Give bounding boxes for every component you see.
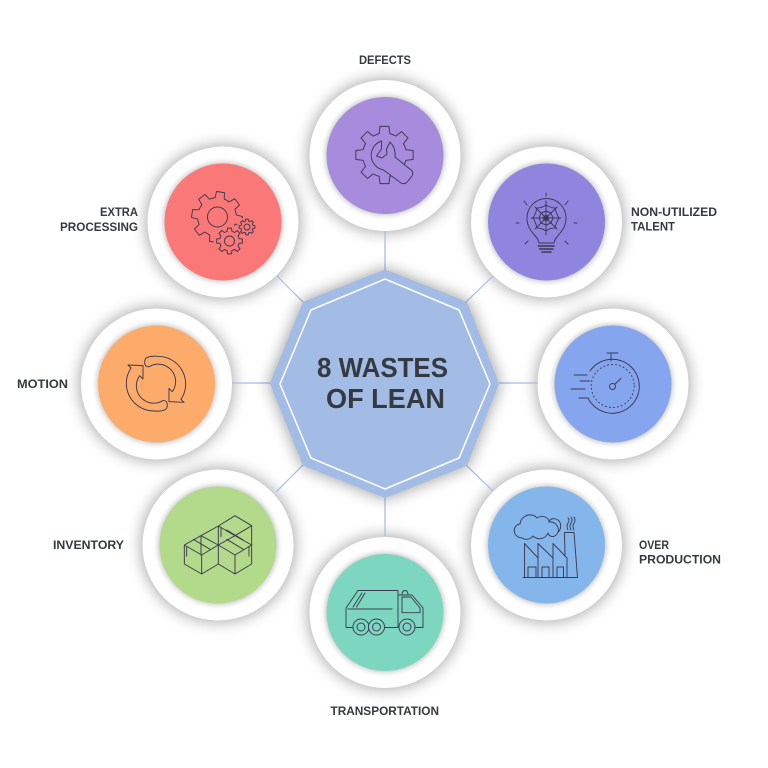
panel: defects <box>309 53 461 232</box>
title <box>317 352 448 414</box>
label: inventory: INVENTORY <box>53 538 124 552</box>
label: extra processing <box>60 205 138 234</box>
title: 8 WASTES <box>317 352 448 383</box>
icon: stopwatch <box>571 353 639 413</box>
label: extra processing: PROCESSING <box>60 220 138 234</box>
panel: motion <box>17 308 232 460</box>
icon: truck <box>346 590 423 635</box>
label: motion: MOTION <box>17 379 68 391</box>
label: non-utilized talent: NON-UTILIZED <box>631 205 717 219</box>
icon: circular arrows <box>126 356 186 411</box>
central octagon <box>270 270 499 498</box>
icon: stacked boxes <box>184 516 252 574</box>
icon: gears <box>189 189 257 257</box>
label: non-utilized talent: TALENT <box>631 220 676 234</box>
label: defects: DEFECTS <box>359 53 411 67</box>
label: over production <box>639 538 721 566</box>
title: OF LEAN <box>326 383 445 414</box>
label: non-utilized talent <box>631 205 717 234</box>
icon: gear and wrench <box>356 126 413 184</box>
panel: extra processing <box>60 146 299 298</box>
panel: over-speed stopwatch <box>537 308 689 460</box>
icon: factory <box>514 515 578 578</box>
panel: non-utilized talent <box>470 146 717 298</box>
panel: inventory <box>53 469 294 621</box>
label: over production: OVER <box>639 538 669 552</box>
label: transportation: TRANSPORTATION <box>330 704 439 718</box>
icon: light bulb with web <box>516 193 577 252</box>
connector lines <box>232 231 538 536</box>
panel: transportation <box>309 536 461 718</box>
label: over production: PRODUCTION <box>639 552 721 566</box>
label: extra processing: EXTRA <box>100 205 138 219</box>
panel: over production <box>470 469 721 621</box>
